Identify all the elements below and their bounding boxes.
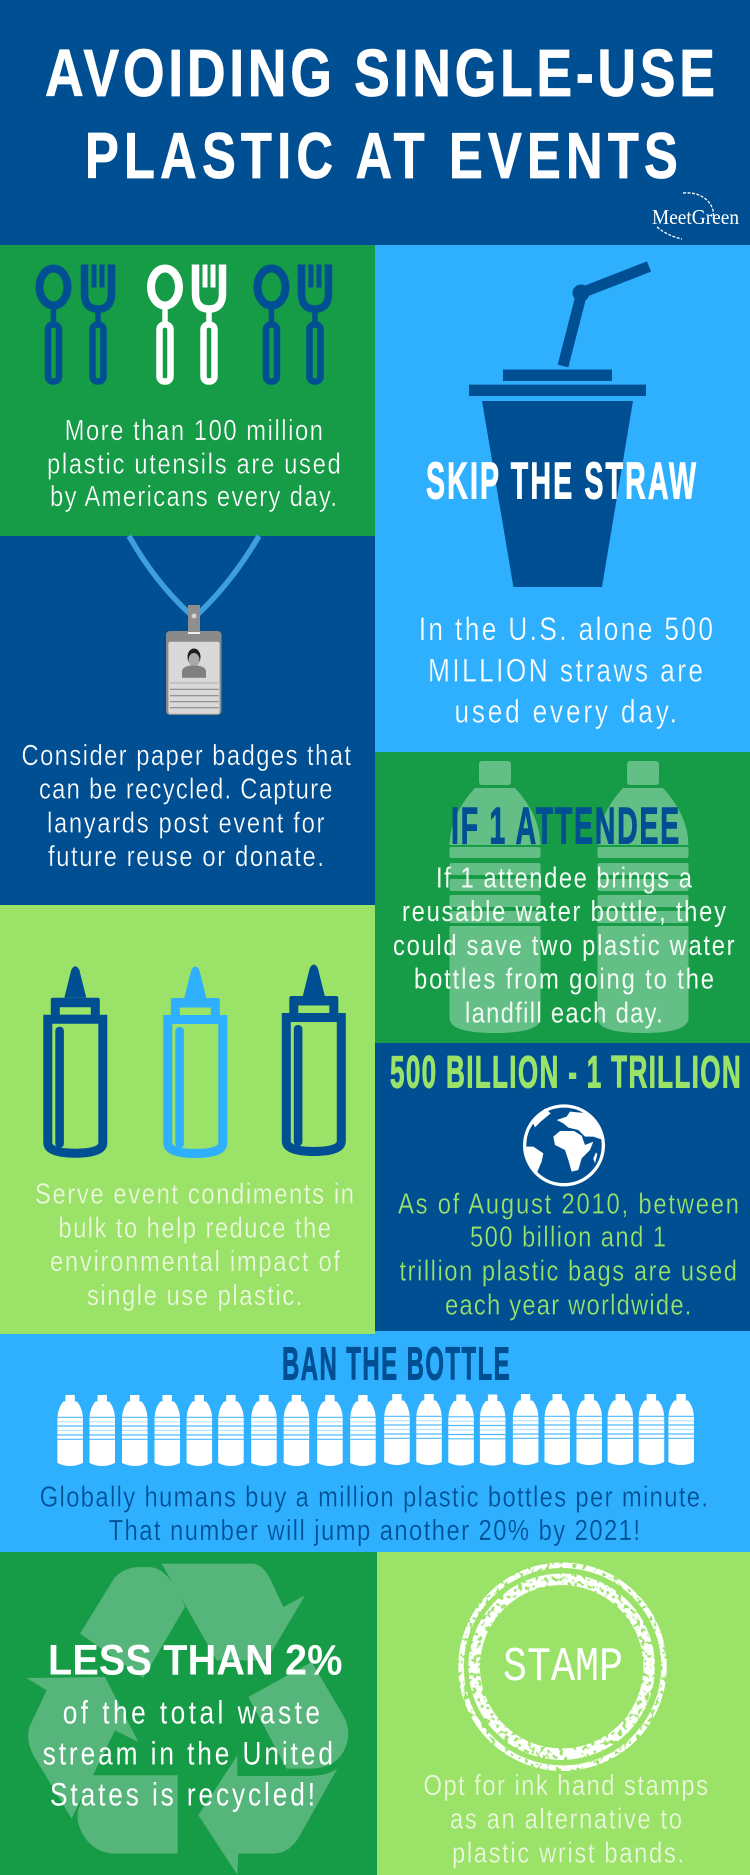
title: PLASTIC AT EVENTS	[85, 120, 678, 192]
panel: utensils	[0, 245, 375, 536]
icon: row of bottles	[57, 1394, 694, 1466]
text: bags fact: As of August 2010, between	[398, 1187, 739, 1220]
icon: recycle symbol	[27, 1564, 348, 1875]
panel: badges	[0, 536, 375, 905]
icon: reusable bottles	[450, 761, 688, 1033]
icon: white spoon and fork	[151, 264, 222, 382]
text: bags fact: 500 billion and 1	[470, 1220, 666, 1253]
text: straw fact: In the U.S. alone 500	[419, 613, 713, 648]
title	[45, 35, 715, 192]
text: badge tip: future reuse or donate.	[48, 840, 324, 873]
panel: condiments	[0, 905, 375, 1334]
text: straw fact: MILLION straws are	[428, 654, 703, 689]
text: utensils fact	[47, 414, 341, 513]
panel: plastic bags	[375, 1043, 750, 1331]
text: condiment tip	[35, 1177, 354, 1312]
text: bags fact: each year worldwide.	[445, 1288, 691, 1321]
icon: blue spoon and fork	[40, 264, 112, 382]
text: stamp tip: as an alternative to	[450, 1802, 682, 1835]
text: bottle fact: Globally humans buy a million plastic bottles per minute.	[40, 1480, 708, 1513]
heading: skip the straw: SKIP THE STRAW	[426, 452, 696, 510]
text: badge tip: can be recycled. Capture	[39, 772, 332, 805]
panel: stamp	[377, 1552, 750, 1875]
text: straw fact	[419, 613, 713, 730]
text: stamp tip	[424, 1769, 708, 1869]
text: bags fact	[398, 1187, 739, 1321]
heading: if 1 attendee: IF 1 ATTENDEE	[451, 796, 679, 854]
text: recycling fact: of the total waste	[63, 1696, 320, 1731]
text: attendee fact: landfill each day.	[465, 996, 663, 1029]
heading: 500 billion to 1 trillion: 500 BILLION - 1 TRILLION	[390, 1047, 741, 1097]
text: bags fact: trillion plastic bags are used	[400, 1254, 737, 1287]
icon: lanyard with badge	[129, 536, 259, 715]
text: attendee fact: could save two plastic water	[393, 929, 735, 962]
text: badge tip: Consider paper badges that	[22, 739, 352, 772]
text: recycling fact: States is recycled!	[50, 1778, 315, 1813]
text: badge tip: lanyards post event for	[47, 806, 325, 839]
text: stamp label: STAMP	[503, 1641, 623, 1695]
text: stamp tip: Opt for ink hand stamps	[424, 1769, 708, 1802]
icon: stamp ring	[461, 1565, 664, 1768]
text: condiment tip: environmental impact of	[50, 1245, 341, 1278]
text: bottle fact: That number will jump another 20% by 2021!	[109, 1514, 640, 1547]
text: attendee fact: If 1 attendee brings a	[436, 861, 692, 894]
text: utensils fact: plastic utensils are used	[47, 447, 341, 480]
panel: header	[0, 0, 750, 245]
panel: recycling	[0, 1552, 377, 1875]
icon: blue spoon and fork 2	[258, 264, 328, 382]
heading: ban the bottle: BAN THE BOTTLE	[282, 1338, 510, 1389]
text: condiment tip: single use plastic.	[87, 1279, 302, 1312]
text: condiment tip: bulk to help reduce the	[58, 1211, 331, 1244]
text: badge tip	[22, 739, 352, 873]
text: attendee fact	[393, 861, 735, 1029]
icon: cup with straw	[469, 266, 649, 587]
panel: if 1 attendee	[375, 752, 750, 1043]
icon: globe	[525, 1106, 604, 1185]
text: recycling fact	[43, 1696, 333, 1813]
text: stamp tip: plastic wrist bands.	[452, 1836, 684, 1869]
text: condiment tip: Serve event condiments in	[35, 1177, 354, 1210]
heading: less than 2%: LESS THAN 2%	[48, 1636, 342, 1684]
text: attendee fact: bottles from going to the	[414, 962, 714, 995]
text: utensils fact: More than 100 million	[65, 414, 323, 447]
icon: MeetGreen logo: MeetGreen	[652, 205, 739, 229]
text: utensils fact: by Americans every day.	[50, 480, 337, 513]
panel: ban the bottle	[0, 1331, 750, 1552]
title: AVOIDING SINGLE-USE	[45, 35, 715, 110]
text: attendee fact: reusable water bottle, they	[402, 895, 727, 928]
text: recycling fact: stream in the United	[43, 1737, 333, 1772]
panel: skip the straw	[375, 245, 750, 752]
text: straw fact: used every day.	[454, 695, 677, 730]
text: bottle fact	[40, 1480, 708, 1547]
icon: MeetGreen logo	[652, 193, 739, 239]
icon: condiment bottles	[48, 964, 341, 1154]
